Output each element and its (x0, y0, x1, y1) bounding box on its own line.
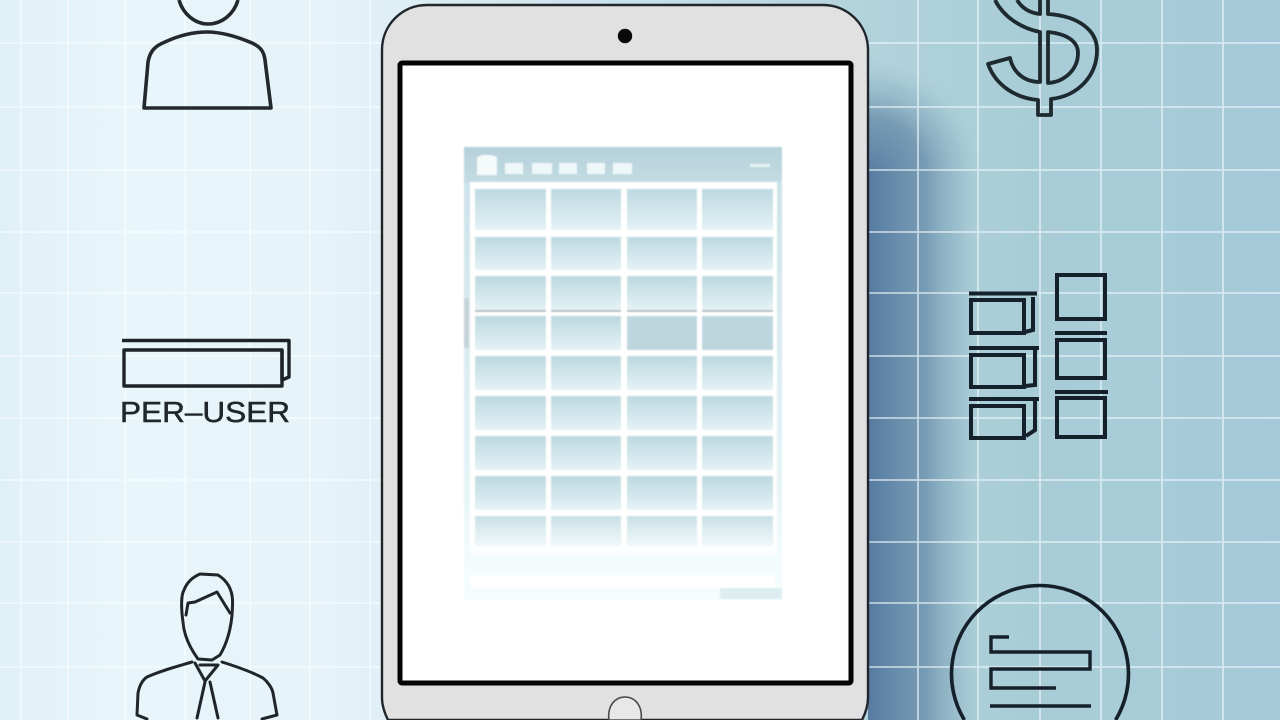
table header (464, 147, 782, 182)
icon: businessman (137, 574, 277, 719)
icon: circled list (952, 585, 1128, 720)
home button (609, 697, 641, 720)
icon: stacked card (122, 340, 289, 386)
label: per-user: PER–USER (120, 397, 290, 429)
icon: dollar sign (988, 0, 1097, 115)
icon: per-user card with label (120, 340, 290, 429)
right cards (1055, 275, 1108, 437)
background grid left (0, 0, 382, 720)
camera (618, 29, 632, 43)
table body (470, 182, 777, 555)
pricing table (464, 147, 782, 600)
tablet cast shadow (868, 58, 985, 720)
left cards (969, 294, 1039, 438)
highlighted row line (475, 310, 773, 312)
table footer row (470, 575, 775, 588)
screen (400, 63, 851, 683)
tablet body (382, 5, 868, 720)
tablet (382, 5, 868, 720)
icon: person (144, 0, 271, 108)
table panel (464, 147, 782, 600)
icon: plan card grid (969, 275, 1108, 438)
side handle (464, 298, 469, 348)
table footer fade (464, 500, 782, 600)
table cells (475, 189, 773, 546)
background grid right (868, 0, 1280, 720)
